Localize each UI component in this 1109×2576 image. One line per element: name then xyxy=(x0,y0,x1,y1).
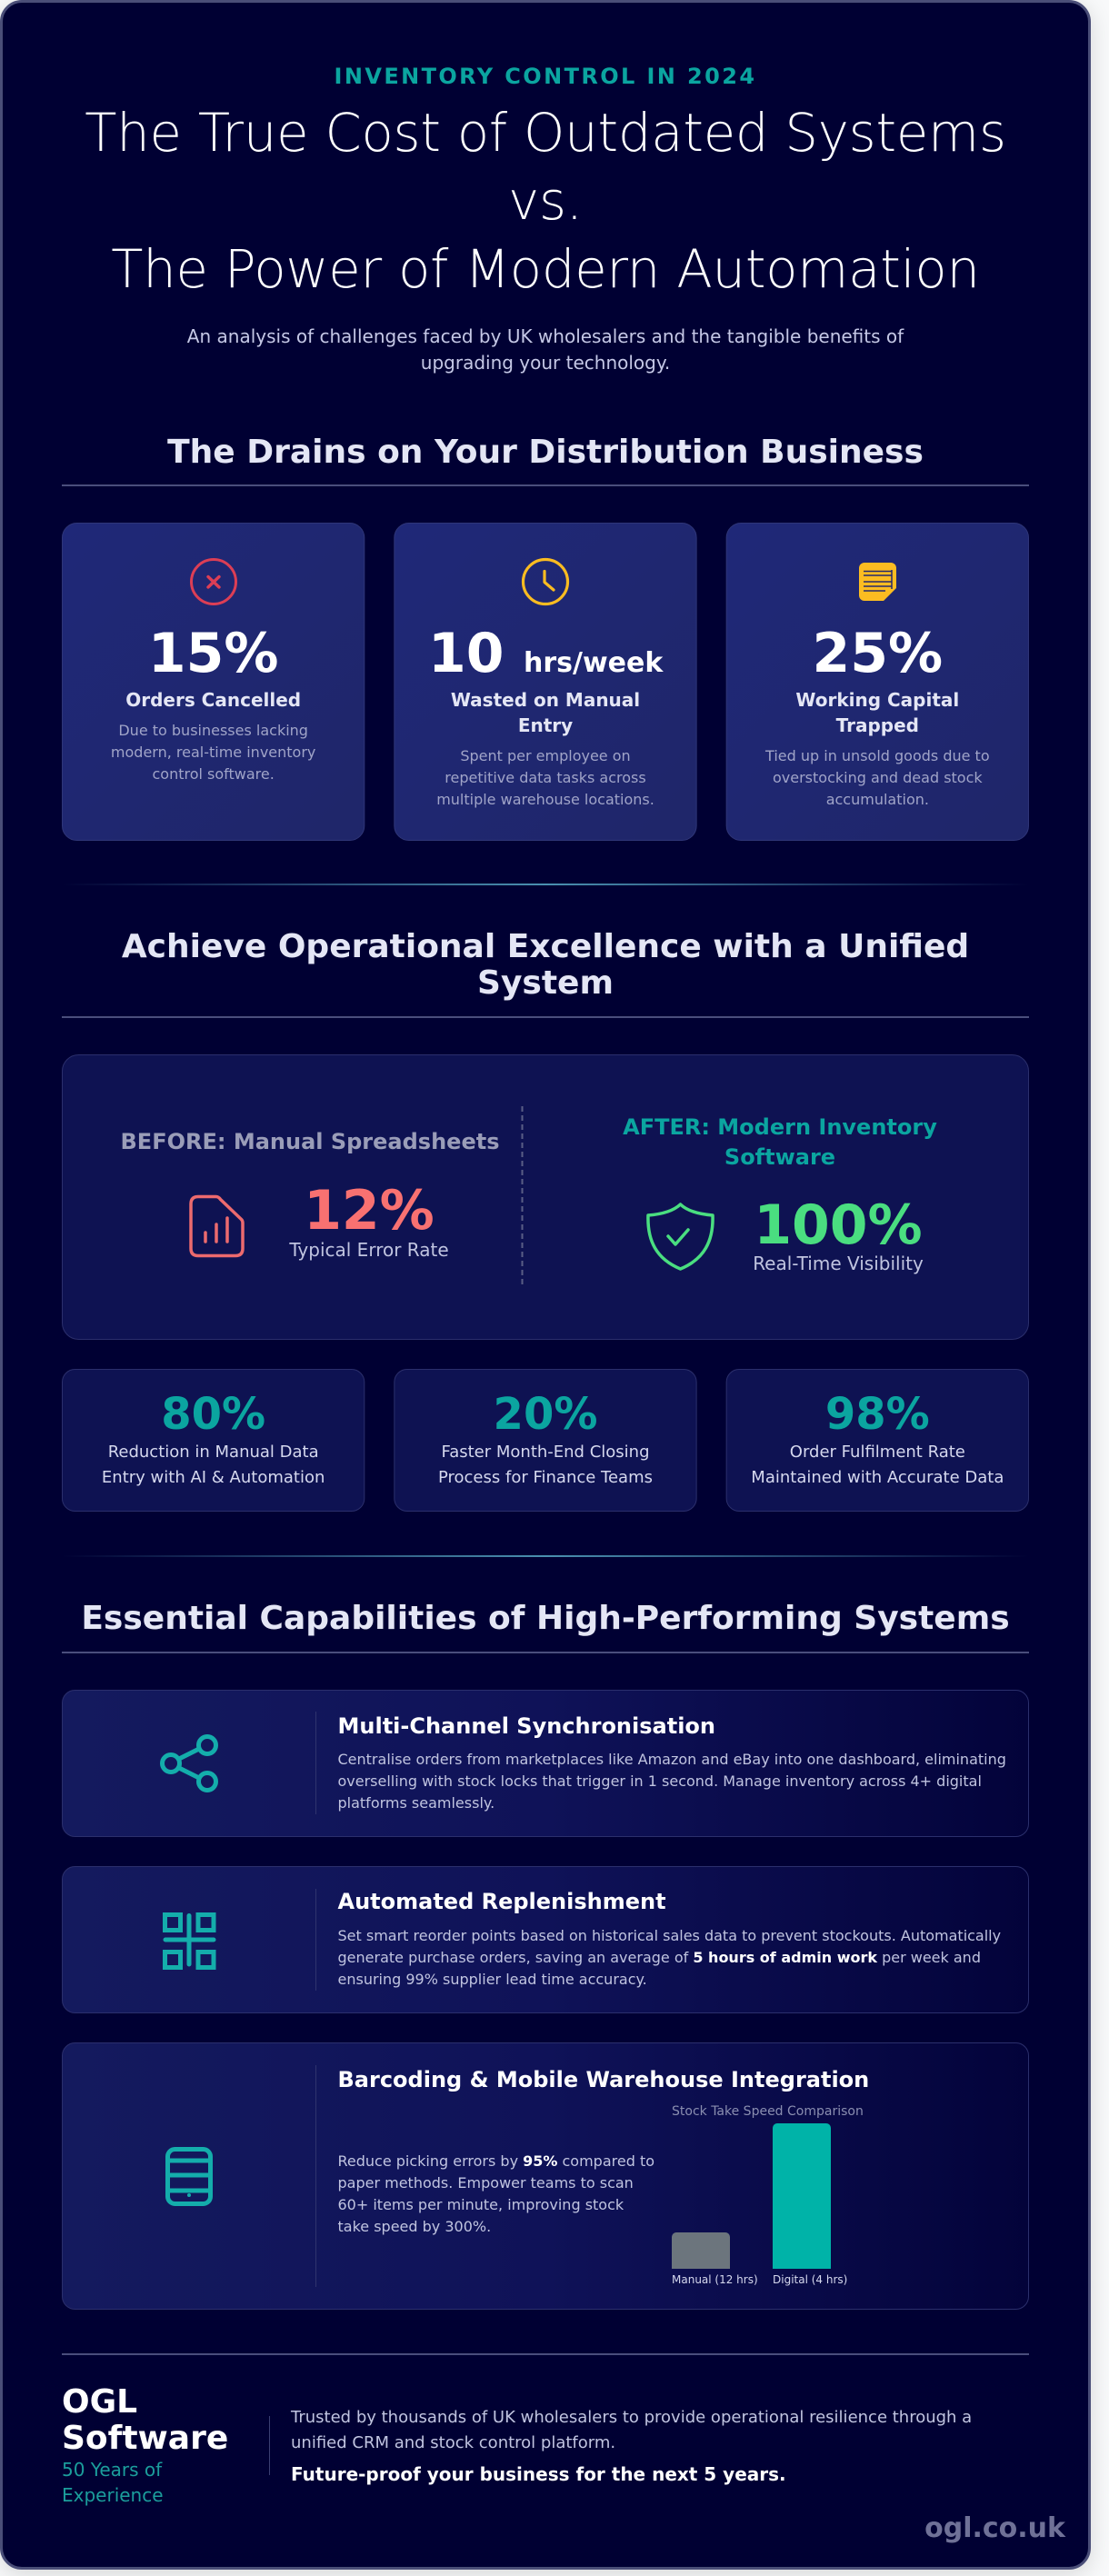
panel: working capital xyxy=(726,524,1028,840)
footer xyxy=(62,2383,1066,2544)
footer message xyxy=(290,2408,972,2485)
panel: stat 20%: Faster Month-End Closing xyxy=(442,1443,649,1462)
section heading: operational excellence: System xyxy=(477,964,614,1002)
before: 12% xyxy=(304,1179,435,1243)
title: vs. xyxy=(508,171,583,232)
website: ogl.co.uk xyxy=(924,2512,1066,2544)
after: AFTER: Modern Inventory xyxy=(623,1114,937,1140)
panel: replenishment: Set smart reorder points based on historical sales data to prevent stockouts. Automatically xyxy=(338,1927,1001,1944)
panel: wasted hours: repetitive data tasks across xyxy=(445,769,646,786)
panel: barcoding xyxy=(62,2043,1029,2309)
section heading: drains: The Drains on Your Distribution Business xyxy=(167,434,924,471)
panel: stat 80%: Reduction in Manual Data xyxy=(108,1443,319,1462)
header xyxy=(85,64,1006,374)
icon: document chart xyxy=(191,1196,243,1256)
panel: stat 80% xyxy=(62,1369,365,1511)
icon: share xyxy=(162,1736,216,1791)
icon: shield xyxy=(648,1204,713,1269)
panel: wasted hours: hrs/week xyxy=(524,647,664,679)
panel: orders cancelled: Orders Cancelled xyxy=(125,689,301,711)
panel: multi-channel: Centralise orders from marketplaces like Amazon and eBay into one dashboard, eliminating xyxy=(338,1751,1006,1768)
title xyxy=(85,103,1006,300)
subtitle: An analysis of challenges faced by UK wholesalers and the tangible benefits of xyxy=(187,325,904,347)
bar chart: stock take speed: Manual (12 hrs) xyxy=(672,2273,758,2286)
panel: barcoding: Barcoding & Mobile Warehouse Integration xyxy=(338,2067,869,2092)
after xyxy=(623,1114,937,1274)
title: The Power of Modern Automation xyxy=(111,239,980,300)
after: Software xyxy=(724,1144,835,1170)
panel: stat 80%: 80% xyxy=(161,1389,265,1440)
section heading: capabilities: Essential Capabilities of High-Performing Systems xyxy=(81,1600,1010,1637)
subtitle: upgrading your technology. xyxy=(421,352,670,374)
footer message: Future-proof your business for the next 5 years. xyxy=(291,2463,786,2485)
panel: wasted hours: multiple warehouse locations. xyxy=(436,791,654,808)
panel: stat 98%: Maintained with Accurate Data xyxy=(751,1468,1004,1487)
panel: stat 20%: Process for Finance Teams xyxy=(438,1468,653,1487)
panel: replenishment: Automated Replenishment xyxy=(338,1889,666,1914)
before: Typical Error Rate xyxy=(288,1239,449,1261)
panel: working capital: Trapped xyxy=(836,714,919,736)
icon: grid xyxy=(165,1914,214,1967)
panel: orders cancelled: control software. xyxy=(152,765,275,783)
panel: working capital: 25% xyxy=(813,622,943,685)
panel: before and after xyxy=(62,1054,1029,1340)
panel: stat 98%: 98% xyxy=(825,1389,930,1440)
panel: stat 98% xyxy=(726,1369,1028,1511)
panel: stat 98%: Order Fulfilment Rate xyxy=(790,1443,965,1462)
footer message: Trusted by thousands of UK wholesalers to provide operational resilience through a xyxy=(290,2408,972,2427)
panel: orders cancelled: modern, real-time inventory xyxy=(111,744,315,761)
panel: orders cancelled xyxy=(62,524,365,840)
panel: stat 20%: 20% xyxy=(494,1389,597,1440)
panel: multi-channel: overselling with stock locks that trigger in 1 second. Manage inventory across 4+ digital xyxy=(338,1772,982,1790)
brand xyxy=(62,2383,228,2506)
panel: stat 80%: Entry with AI & Automation xyxy=(102,1468,325,1487)
brand: OGL xyxy=(62,2383,137,2421)
brand: Software xyxy=(62,2420,228,2457)
footer message: unified CRM and stock control platform. xyxy=(291,2433,615,2452)
panel: replenishment: ensuring 99% supplier lead time accuracy. xyxy=(338,1971,647,1988)
panel: working capital: Working Capital xyxy=(795,689,959,711)
after: Real-Time Visibility xyxy=(753,1253,924,1274)
panel: wasted hours: Wasted on Manual xyxy=(451,689,640,711)
section heading: operational excellence xyxy=(62,928,1029,1018)
subtitle xyxy=(187,325,904,374)
panel: wasted hours: Entry xyxy=(518,714,573,736)
panel: working capital: overstocking and dead stock xyxy=(773,769,983,786)
panel: wasted hours xyxy=(395,524,696,840)
panel: replenishment xyxy=(62,1867,1029,2012)
section heading: operational excellence: Achieve Operational Excellence with a Unified xyxy=(122,928,969,965)
panel: multi-channel: Multi-Channel Synchronisation xyxy=(338,1713,715,1739)
bar chart: stock take speed: Stock Take Speed Comparison xyxy=(672,2104,864,2119)
icon: cross circle xyxy=(191,560,236,604)
eyebrow: INVENTORY CONTROL IN 2024 xyxy=(335,64,756,89)
panel: barcoding: take speed by 300%. xyxy=(338,2218,491,2235)
after: 100% xyxy=(754,1193,923,1257)
icon: note xyxy=(859,563,896,601)
panel: barcoding: 60+ items per minute, improving stock xyxy=(338,2196,624,2213)
panel: working capital: Tied up in unsold goods due to xyxy=(764,747,990,764)
title: The True Cost of Outdated Systems xyxy=(85,103,1006,164)
panel: barcoding: paper methods. Empower teams to scan xyxy=(338,2174,634,2192)
brand: Experience xyxy=(62,2484,164,2506)
panel: multi-channel xyxy=(62,1691,1029,1836)
bar chart: stock take speed: Digital (4 hrs) xyxy=(773,2273,847,2286)
before xyxy=(121,1129,499,1261)
panel: working capital: accumulation. xyxy=(826,791,929,808)
panel: wasted hours: Spent per employee on xyxy=(460,747,631,764)
bar chart: stock take speed xyxy=(672,2104,864,2286)
brand: 50 Years of xyxy=(62,2459,163,2481)
panel: orders cancelled: 15% xyxy=(148,622,278,685)
before: BEFORE: Manual Spreadsheets xyxy=(121,1129,499,1154)
panel: orders cancelled: Due to businesses lacking xyxy=(118,722,308,739)
icon: clock xyxy=(524,560,567,604)
panel: stat 20% xyxy=(395,1369,696,1511)
panel: barcoding: Reduce picking errors by 95% compared to xyxy=(338,2152,654,2170)
icon: device xyxy=(167,2149,211,2203)
panel: wasted hours: 10 xyxy=(428,622,504,685)
panel: replenishment: generate purchase orders, saving an average of 5 hours of admin work per week and xyxy=(338,1949,981,1966)
panel: multi-channel: platforms seamlessly. xyxy=(338,1794,495,1812)
